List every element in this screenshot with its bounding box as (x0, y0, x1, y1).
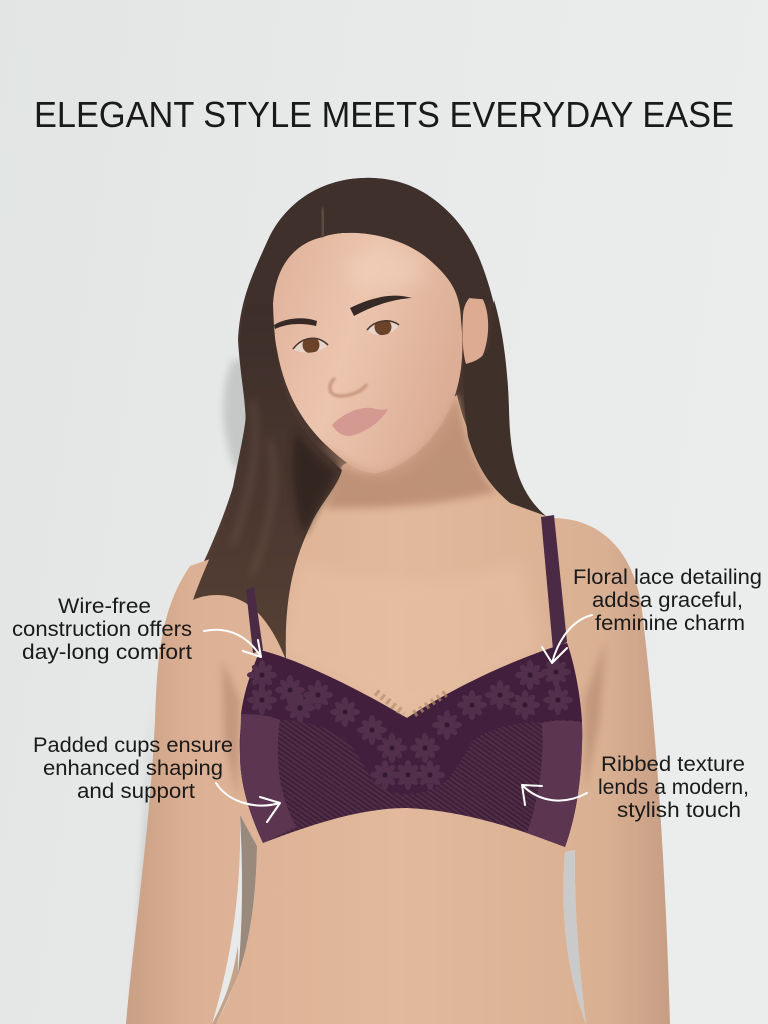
right side gap (564, 850, 586, 1024)
body shading: chest tone (280, 560, 540, 718)
hair behind the neck (200, 178, 523, 640)
right hair lock (463, 300, 546, 516)
callout: padded cups (33, 734, 280, 822)
callout: padded cups: and support (77, 780, 195, 803)
callout: wire-free construction (12, 595, 261, 664)
arrow (216, 783, 280, 822)
callout: floral lace (542, 566, 762, 663)
callout: ribbed texture (522, 753, 749, 822)
callout text: Wire-free (58, 595, 151, 618)
nose (330, 378, 367, 396)
left strap (246, 587, 263, 653)
left side gap fill (212, 945, 238, 1024)
callout: wire-free construction: construction offers (12, 618, 192, 641)
callout text: Ribbed texture (601, 753, 745, 776)
face (273, 233, 462, 473)
callout: ribbed texture: stylish touch (617, 799, 741, 822)
callout: floral lace: feminine charm (595, 612, 745, 635)
callout: ribbed texture: lends a modern, (598, 776, 749, 799)
title: ELEGANT STYLE MEETS EVERYDAY EASE (34, 94, 734, 135)
callout text: Floral lace detailing (573, 566, 762, 589)
left side gap (238, 815, 257, 975)
garment body (240, 643, 582, 847)
left eye (293, 336, 328, 354)
torso and arms (126, 395, 670, 1024)
lace openwork (376, 692, 448, 714)
lace overlay (241, 643, 582, 794)
eyebrows (274, 296, 412, 329)
arrow (204, 630, 261, 657)
arrow (542, 615, 592, 663)
hair strands (232, 400, 274, 575)
side panel right (527, 721, 582, 847)
callout text: Padded cups ensure (33, 734, 233, 757)
left front hair lock (193, 303, 342, 660)
callout: wire-free construction: day-long comfort (22, 641, 192, 664)
dark under-hair by the neck (293, 430, 336, 535)
body shading: arm creases (222, 640, 606, 800)
hair top (246, 178, 492, 310)
ear (462, 294, 488, 366)
lace flowers (247, 660, 277, 690)
body shading: neck shadow (325, 395, 496, 508)
forehead highlight (345, 250, 425, 290)
right eye (367, 318, 399, 336)
hair parting highlight (322, 208, 323, 236)
callout: padded cups: enhanced shaping (43, 757, 223, 780)
lips (332, 408, 388, 436)
right strap (541, 515, 567, 650)
model figure (126, 178, 670, 1024)
callout: floral lace: addsa graceful, (592, 589, 743, 612)
wall shadow (132, 360, 252, 1024)
arrow (522, 785, 587, 805)
cheek shade (320, 390, 457, 481)
side panel left (240, 714, 297, 843)
